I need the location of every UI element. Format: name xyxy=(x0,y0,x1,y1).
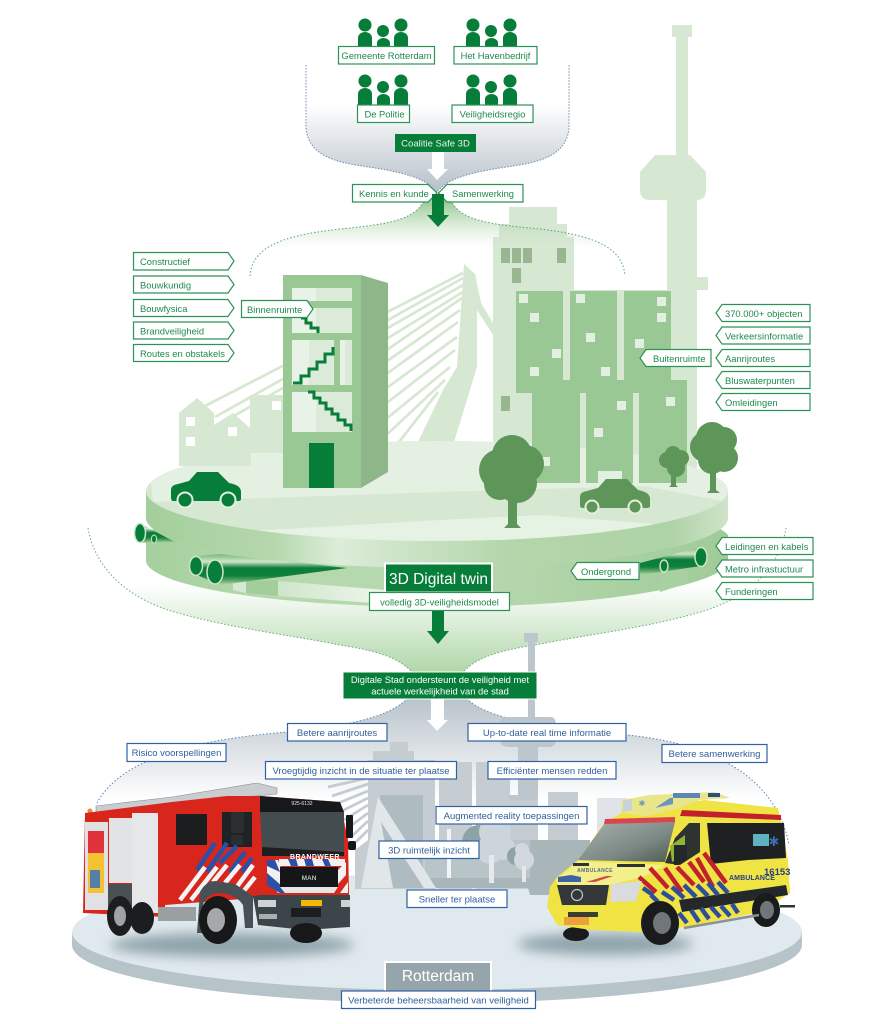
front xyxy=(557,868,642,925)
disc surface xyxy=(146,441,728,541)
label: Vroegtijdig inzicht: Vroegtijdig inzicht in de situatie ter plaatse xyxy=(272,766,450,777)
funnel: coalition xyxy=(306,65,569,192)
building: green offices xyxy=(516,291,687,483)
ambulance wheels xyxy=(641,893,795,945)
beacon: ✱ xyxy=(639,799,646,808)
ambulance side text xyxy=(729,867,790,882)
label: Constructief: Constructief xyxy=(140,256,190,267)
ambulance body xyxy=(547,800,790,932)
label: De Politie: De Politie xyxy=(364,108,405,119)
grey buildings xyxy=(355,742,578,889)
label: Verkeersinformatie: Verkeersinformatie xyxy=(725,330,803,341)
side stripes xyxy=(180,843,255,900)
base disc xyxy=(72,874,802,1003)
front: AMBULANCE xyxy=(577,868,613,874)
windshield xyxy=(260,796,344,856)
icon: people Gemeente Rotterdam xyxy=(358,18,408,47)
label: Omleidingen: Omleidingen xyxy=(725,397,778,408)
label: Binnenruimte xyxy=(242,300,313,318)
pipes: left xyxy=(134,524,347,585)
grey tower xyxy=(500,633,556,840)
label: Buitenruimte xyxy=(640,350,711,366)
grey pylon xyxy=(361,797,436,888)
windshield xyxy=(578,822,675,862)
building: cutaway with stairs xyxy=(283,275,388,488)
label: Gemeente Rotterdam: Gemeente Rotterdam xyxy=(341,50,432,61)
label: Buitenruimte: Buitenruimte xyxy=(653,353,706,364)
shutters xyxy=(85,813,158,913)
label: Digitale Stad: Digitale Stad ondersteunt de veiligheid met xyxy=(351,674,530,685)
arrow: green down 2 xyxy=(427,611,449,644)
label: Leidingen en kabels: Leidingen en kabels xyxy=(725,541,809,552)
foundations xyxy=(233,570,688,604)
label: Coalitie Safe 3D: Coalitie Safe 3D xyxy=(401,138,470,150)
label: De Politie xyxy=(358,105,410,122)
arrow: white down 2 xyxy=(427,699,448,731)
labels: building aspects xyxy=(134,252,234,362)
label: 370.000+ objecten: 370.000+ objecten xyxy=(725,308,802,319)
heading: Rotterdam xyxy=(385,962,491,992)
label: Samenwerking: Samenwerking xyxy=(452,188,514,199)
label: 3D ruimtelijk inzicht xyxy=(379,841,479,858)
label: Het Havenbedrijf xyxy=(454,46,537,64)
disc lower layer xyxy=(145,499,728,607)
houses xyxy=(179,395,285,466)
label: Bluswaterpunten: Bluswaterpunten xyxy=(725,375,795,386)
label: Efficiënter mensen redden xyxy=(488,762,616,779)
label: Ondergrond xyxy=(571,562,639,580)
label: Ondergrond: Ondergrond xyxy=(581,566,631,577)
roof rack xyxy=(88,783,277,814)
label: Gemeente Rotterdam xyxy=(338,46,434,64)
windshield: 925-6132 xyxy=(291,801,313,807)
funnel: to emergency services xyxy=(97,699,789,845)
icon: people Het Havenbedrijf xyxy=(466,18,517,47)
grille and bumper: MAN xyxy=(302,875,317,882)
tree: large xyxy=(479,435,544,528)
chevrons xyxy=(639,853,738,923)
label: Funderingen: Funderingen xyxy=(725,586,778,597)
icon: people Veiligheidsregio xyxy=(466,74,517,106)
label: Veiligheidsregio xyxy=(452,105,533,122)
tower: Euromast green xyxy=(640,25,708,470)
lower band xyxy=(679,885,788,912)
bridge: Erasmus cables and pylon xyxy=(205,264,493,442)
labels: underground xyxy=(716,538,813,600)
label: Up-to-date real time informatie xyxy=(468,724,626,741)
grey cable hatch xyxy=(328,778,368,842)
truck body xyxy=(83,796,349,917)
label: Kennis en kunde xyxy=(352,184,437,202)
label: Vroegtijdig inzicht xyxy=(266,762,456,779)
arrow: white down xyxy=(427,152,448,180)
label: Augmented reality toepassingen: Augmented reality toepassingen xyxy=(444,811,579,822)
vehicle: fire truck xyxy=(83,783,356,944)
people icons xyxy=(358,18,517,106)
cab windows xyxy=(176,812,252,847)
label: Bouwfysica: Bouwfysica xyxy=(140,303,188,314)
city: grey skyline xyxy=(328,633,627,895)
grille and bumper xyxy=(158,854,350,933)
label: Betere samenwerking: Betere samenwerking xyxy=(669,749,760,760)
label: Coalitie Safe 3D xyxy=(395,134,476,152)
label: Kennis en kunde: Kennis en kunde xyxy=(359,188,429,199)
label: volledig 3D-veiligheidsmodel: volledig 3D-veiligheidsmodel xyxy=(380,596,499,607)
label: Verbeterde beheersbaarheid xyxy=(342,991,536,1008)
ambulance side text: AMBULANCE xyxy=(729,875,775,882)
label: Risico voorspellingen: Risico voorspellingen xyxy=(132,748,221,759)
labels: benefits xyxy=(127,724,767,908)
tree: medium xyxy=(690,422,738,493)
disc upper rim xyxy=(146,491,728,568)
label: Digitale Stad xyxy=(343,672,537,699)
label: Veiligheidsregio: Veiligheidsregio xyxy=(460,108,525,119)
city disc xyxy=(145,430,728,607)
funnel: digital twin xyxy=(88,528,786,672)
label: Bouwkundig: Bouwkundig xyxy=(140,279,191,290)
labels: city data xyxy=(716,304,810,410)
side windows xyxy=(665,810,786,865)
pipes: right xyxy=(640,547,707,575)
truck wheels xyxy=(107,896,322,944)
label: Verbeterde beheersbaarheid: Verbeterde beheersbaarheid van veiligheid xyxy=(348,995,529,1006)
label: Augmented reality toepassingen xyxy=(436,806,587,824)
label: Binnenruimte: Binnenruimte xyxy=(247,304,302,315)
shadow: ambulance xyxy=(517,933,693,955)
building: old tower behind xyxy=(493,207,671,470)
car: light green xyxy=(580,479,650,514)
label: Up-to-date real time informatie: Up-to-date real time informatie xyxy=(483,728,611,739)
ambulance wheel under bumper xyxy=(563,927,589,941)
shadow: truck xyxy=(110,933,354,957)
mirrors xyxy=(346,815,356,850)
label: Efficiënter mensen redden: Efficiënter mensen redden xyxy=(497,766,607,777)
label: Routes en obstakels: Routes en obstakels xyxy=(140,348,225,359)
label: Het Havenbedrijf: Het Havenbedrijf xyxy=(461,50,531,61)
label: Betere aanrijroutes xyxy=(288,724,387,741)
car: dark green xyxy=(171,472,241,508)
label: 3D ruimtelijk inzicht: 3D ruimtelijk inzicht xyxy=(388,845,470,856)
label: Betere aanrijroutes: Betere aanrijroutes xyxy=(297,728,377,739)
label: Aanrijroutes: Aanrijroutes xyxy=(725,353,775,364)
label: Betere samenwerking xyxy=(662,744,767,762)
vehicle: ambulance xyxy=(547,792,795,945)
heading: 3D Digital twin xyxy=(385,564,492,592)
label: Sneller ter plaatse xyxy=(407,890,507,908)
label: Risico voorspellingen xyxy=(127,744,226,762)
heading: Rotterdam: Rotterdam xyxy=(402,968,474,985)
label: Samenwerking xyxy=(438,184,523,202)
arrow: green down xyxy=(427,194,449,227)
tree: small xyxy=(659,446,689,487)
heading: 3D Digital twin: 3D Digital twin xyxy=(389,571,488,588)
side windows: ✱ xyxy=(769,834,780,849)
icon: people De Politie xyxy=(358,74,408,106)
ambulance side text: 16153 xyxy=(764,867,790,878)
grey trees xyxy=(462,816,534,883)
beacon xyxy=(621,792,730,816)
label: Brandveiligheid: Brandveiligheid xyxy=(140,325,204,336)
label: Sneller ter plaatse: Sneller ter plaatse xyxy=(419,894,495,905)
grille and bumper: BRANDWEER xyxy=(290,854,340,861)
funnel: knowledge to city xyxy=(250,196,625,276)
hood xyxy=(556,861,665,885)
label: Digitale Stad: actuele werkelijkheid van de stad xyxy=(371,686,509,696)
label: volledig 3D-veiligheidsmodel xyxy=(370,592,510,610)
label: Metro infrastuctuur: Metro infrastuctuur xyxy=(725,563,803,574)
